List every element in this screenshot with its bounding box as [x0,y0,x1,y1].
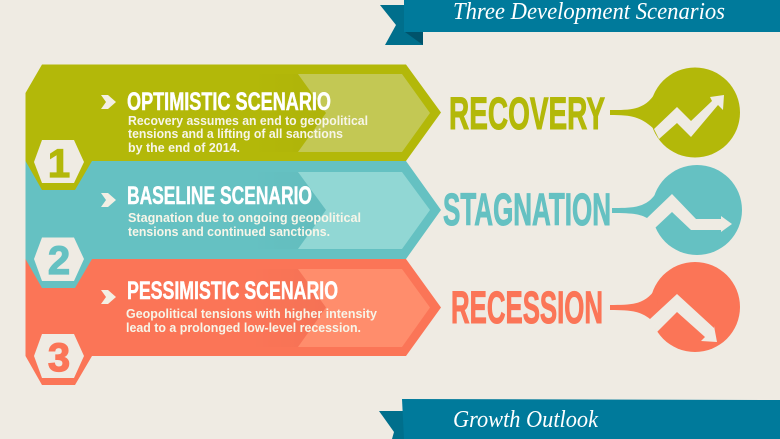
panel: baseline scenario: tensions and continued sanctions. [128,224,330,239]
panel: baseline scenario: 2 [48,239,70,283]
panel: pessimistic scenario: lead to a prolonged low-level recession. [126,320,361,335]
panel: pessimistic scenario: Geopolitical tensions with higher intensity [126,306,378,321]
icon: flat arrow in teal bubble [612,165,742,255]
panel: pessimistic scenario: 3 [48,336,70,380]
panel: optimistic scenario: tensions and a lifting of all sanctions [128,126,343,141]
panel: optimistic scenario [26,64,441,190]
panel: pessimistic scenario [26,259,441,385]
label: Stagnation: STAGNATION [443,184,611,235]
panel: optimistic scenario: Recovery assumes an end to geopolitical [128,113,368,128]
panel: pessimistic scenario: PESSIMISTIC SCENARIO [127,277,338,305]
top banner: Three Development Scenarios [380,0,780,45]
label: Recovery: RECOVERY [449,88,605,139]
panel: baseline scenario [26,161,441,288]
label: Recession: RECESSION [451,282,603,333]
panel: baseline scenario: Stagnation due to ongoing geopolitical [128,210,361,225]
bottom banner: Growth Outlook: Growth Outlook [453,407,598,433]
panel: optimistic scenario: OPTIMISTIC SCENARIO [127,88,331,116]
panel: optimistic scenario: by the end of 2014. [128,140,240,155]
panel: optimistic scenario: 1 [48,142,70,186]
panel: baseline scenario: BASELINE SCENARIO [127,182,312,210]
bottom banner: Growth Outlook [379,399,780,439]
icon: rising arrow in green bubble [610,68,740,158]
icon: falling arrow in orange bubble [610,262,740,352]
